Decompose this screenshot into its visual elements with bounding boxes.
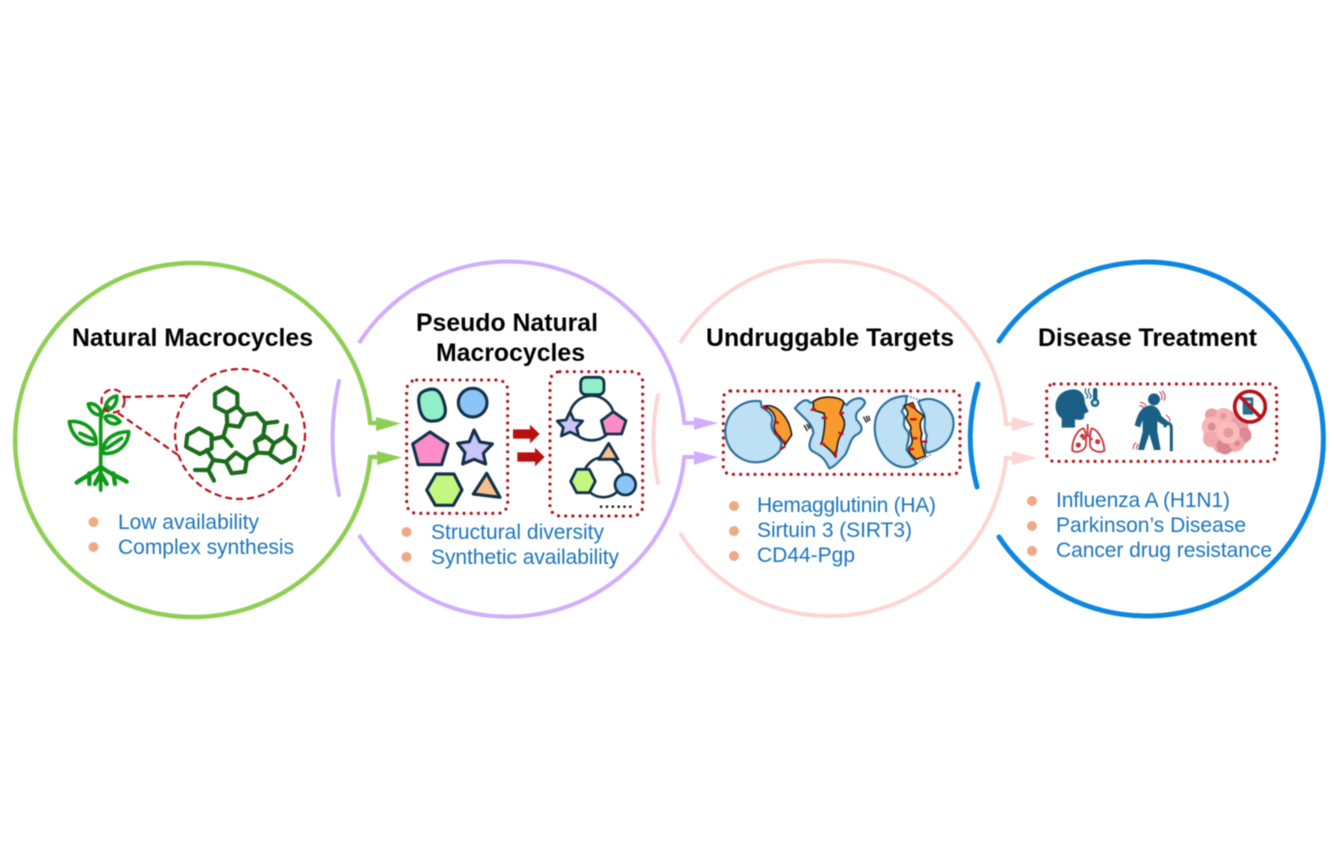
middle pocket: [795, 398, 865, 468]
wave marks: [804, 416, 870, 431]
blue circle: [970, 262, 1323, 616]
assembled macrocycles box: [550, 372, 643, 516]
panel: undruggable targets: [654, 261, 1037, 616]
icon: head with thermometer: [1055, 388, 1099, 428]
purple circle with arrows: [332, 262, 718, 617]
pink circle with arrows: [654, 261, 1037, 616]
heading: undruggable targets: Undruggable Targets: [706, 325, 954, 352]
panel: pseudo natural macrocycles: [332, 262, 718, 617]
bullet list: natural: Low availability: [118, 511, 260, 534]
bullet list: pseudo: Structural diversity: [431, 521, 604, 544]
red arrows: [513, 425, 545, 466]
right complex: [875, 396, 917, 467]
building block box: [407, 380, 508, 513]
bullet list: pseudo: Synthetic availability: [431, 546, 620, 569]
bullet list: targets: [729, 494, 936, 567]
heading: natural macrocycles: Natural Macrocycles: [72, 325, 313, 352]
heading second line: Macrocycles: [436, 340, 585, 367]
bullet list: diseases: Parkinson’s Disease: [1056, 514, 1246, 537]
bullet list: targets: Hemagglutinin (HA): [757, 494, 936, 517]
panel: natural macrocycles: [15, 263, 402, 617]
bullet list: targets: CD44-Pgp: [757, 544, 855, 567]
heading: pseudo natural macrocycles: Pseudo Natural: [416, 310, 598, 337]
target interaction box: [723, 391, 960, 474]
bullet list: diseases: Influenza A (H1N1): [1056, 489, 1230, 512]
bullet list: diseases: Cancer drug resistance: [1056, 539, 1272, 562]
magnifier dashes: [102, 369, 305, 499]
molecule: [186, 388, 295, 481]
bullet list: diseases: [1027, 489, 1272, 562]
bullet list: targets: Sirtuin 3 (SIRT3): [757, 519, 912, 542]
bullet list: natural: [88, 511, 294, 559]
icon: tumour cells with crossed drug: [1202, 391, 1265, 454]
green circle with arrows: [15, 263, 402, 617]
panel: disease treatment: [970, 262, 1323, 616]
bullet list: natural: Complex synthesis: [118, 536, 294, 559]
bullet list: pseudo: [402, 521, 620, 569]
icon: lungs: [1072, 424, 1104, 452]
heading: disease treatment: Disease Treatment: [1038, 325, 1257, 352]
icon: plant: [69, 396, 129, 490]
left pocket: [725, 401, 782, 462]
icon: elderly person with cane: [1133, 391, 1171, 450]
disease icon box: [1047, 384, 1277, 461]
